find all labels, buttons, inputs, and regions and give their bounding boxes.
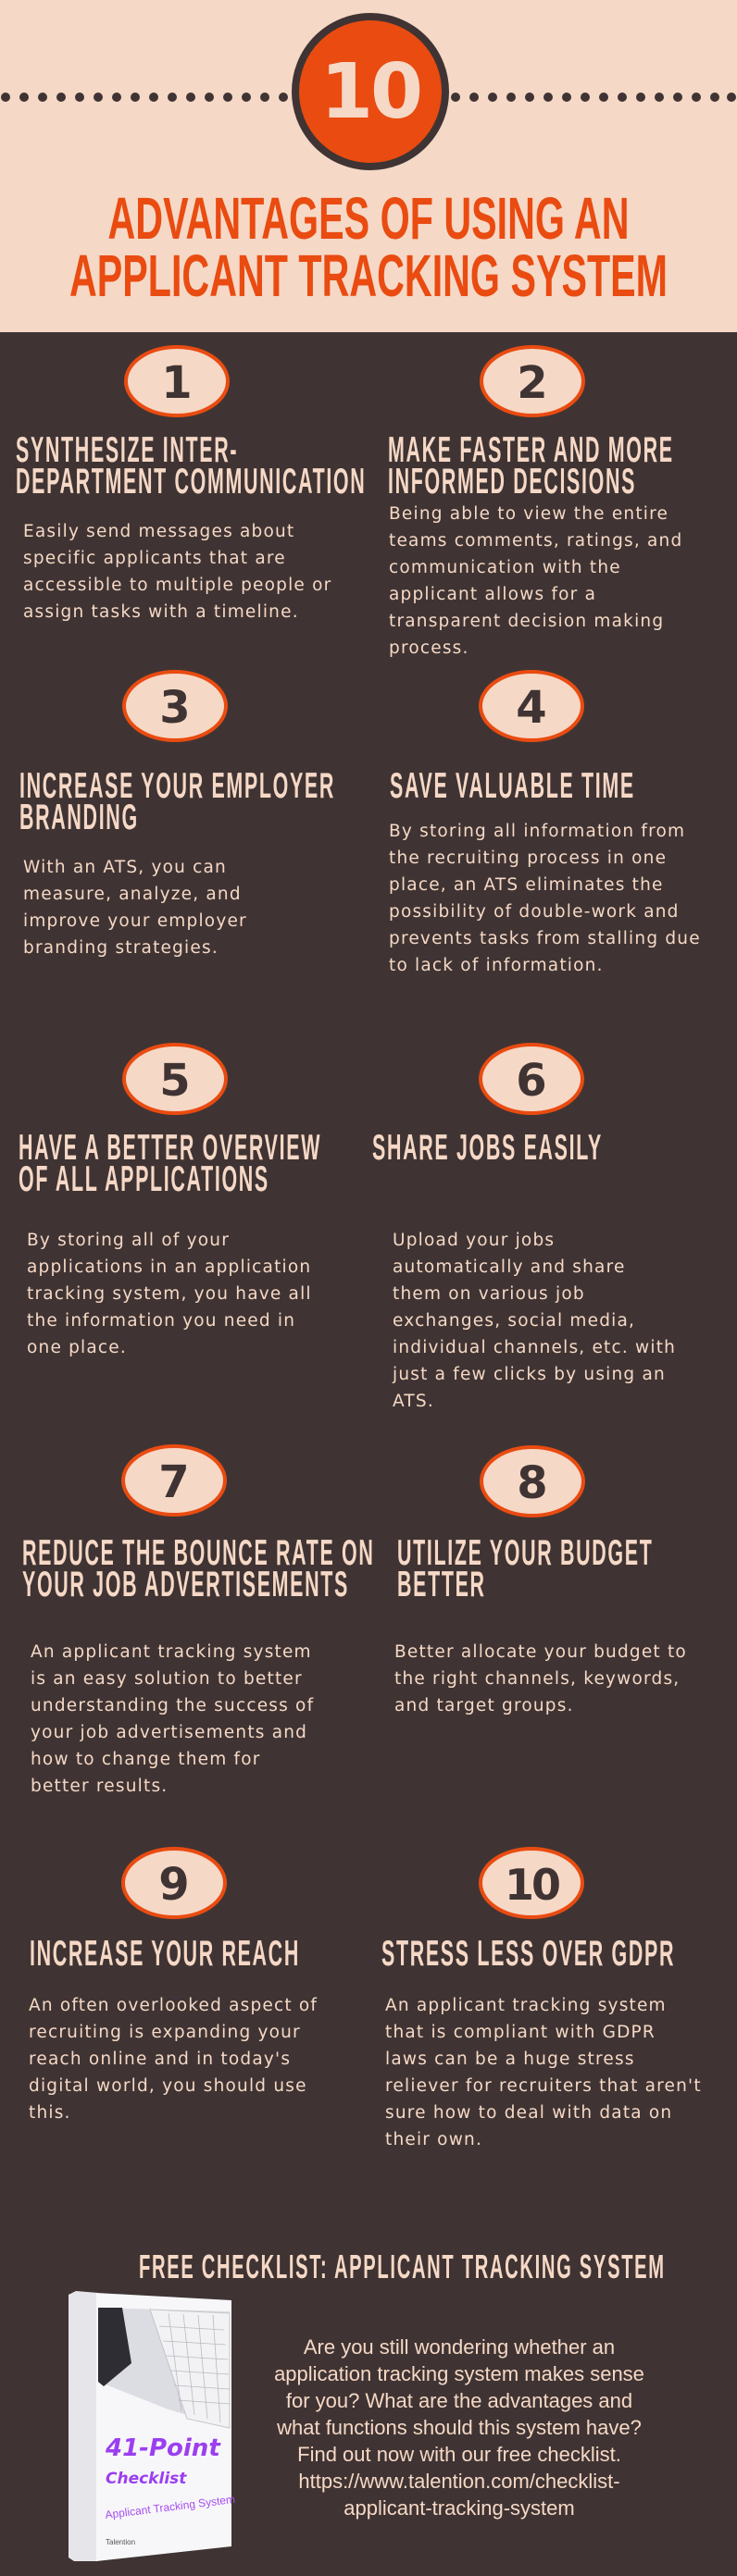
text 10: An applicant tracking system (385, 1996, 667, 2015)
heading 9: INCREASE YOUR REACH (30, 1934, 300, 1974)
heading 1 (16, 430, 366, 502)
text 1: accessible to multiple people or (23, 576, 331, 595)
text 4: place, an ATS eliminates the (389, 875, 664, 895)
heading 4: SAVE VALUABLE TIME (390, 766, 635, 806)
text 3: measure, analyze, and (23, 885, 242, 904)
text 1: assign tasks with a timeline. (23, 602, 299, 622)
text 4: By storing all information from (389, 822, 685, 841)
text 4: to lack of information. (389, 956, 604, 975)
oval 3 (122, 670, 228, 742)
oval 8: 8 (517, 1457, 548, 1509)
heading 5 (19, 1128, 321, 1199)
text 8: and target groups. (394, 1696, 574, 1715)
checklist paragraph: Are you still wondering whether an (304, 2335, 615, 2359)
text 1 (23, 522, 331, 622)
heading 3: BRANDING (19, 798, 139, 837)
text 10: laws can be a huge stress (385, 2050, 635, 2069)
checklist paragraph: Find out now with our free checklist. (297, 2443, 621, 2466)
text 10: that is compliant with GDPR (385, 2023, 656, 2042)
heading 10: STRESS LESS OVER GDPR (381, 1934, 675, 1974)
title (69, 185, 668, 309)
dotted line (1, 93, 736, 102)
text 2: transparent decision making (389, 612, 664, 631)
checklist paragraph: what functions should this system have? (277, 2416, 642, 2439)
text 5: the information you need in (27, 1311, 295, 1331)
big number circle: 10 (320, 48, 420, 136)
text 4: the recruiting process in one (389, 848, 667, 868)
text 6: automatically and share (393, 1257, 626, 1277)
oval 7 (121, 1444, 227, 1517)
oval 6 (479, 1043, 584, 1115)
text 6: Upload your jobs (393, 1231, 555, 1250)
checklist paragraph: applicant-tracking-system (344, 2496, 575, 2520)
oval 8 (480, 1445, 585, 1517)
text 1: Easily send messages about (23, 522, 294, 541)
heading 7: REDUCE THE BOUNCE RATE ON (22, 1533, 374, 1573)
text 6: them on various job (393, 1284, 585, 1304)
oval 9: 9 (158, 1859, 190, 1911)
text 10 (385, 1996, 702, 2149)
checklist paragraph: https://www.talention.com/checklist- (298, 2470, 620, 2493)
oval 10 (479, 1847, 584, 1919)
checklist paragraph: for you? What are the advantages and (286, 2389, 632, 2412)
text 6: exchanges, social media, (393, 1311, 635, 1331)
text 8 (394, 1642, 687, 1715)
heading 2: INFORMED DECISIONS (388, 462, 636, 502)
big number circle (292, 13, 449, 170)
oval 10: 10 (505, 1860, 559, 1910)
text 2: Being able to view the entire (389, 504, 668, 524)
oval 2 (480, 345, 585, 417)
text 1: specific applicants that are (23, 549, 286, 568)
book image: Applicant Tracking System (105, 2493, 235, 2521)
text 9: An often overlooked aspect of (29, 1996, 318, 2015)
text 4: possibility of double-work and (389, 902, 680, 922)
oval 5: 5 (159, 1055, 191, 1107)
heading 8 (397, 1533, 653, 1604)
book image (69, 2291, 235, 2561)
text 7: your job advertisements and (31, 1723, 307, 1742)
text 5: one place. (27, 1338, 127, 1357)
text 7: how to change them for (31, 1750, 261, 1769)
text 3: With an ATS, you can (23, 858, 227, 877)
text 6 (393, 1231, 676, 1411)
text 9: digital world, you should use (29, 2076, 307, 2096)
text 9: reach online and in today's (29, 2050, 291, 2069)
text 5: tracking system, you have all (27, 1284, 312, 1304)
oval 4: 4 (516, 682, 547, 734)
text 2 (389, 504, 682, 658)
oval 9 (121, 1847, 227, 1919)
oval 5 (122, 1043, 228, 1115)
text 6: individual channels, etc. with (393, 1338, 676, 1357)
checklist paragraph: application tracking system makes sense (274, 2362, 644, 2385)
oval 1 (124, 345, 230, 417)
heading 6: SHARE JOBS EASILY (372, 1128, 603, 1168)
heading 2: MAKE FASTER AND MORE (388, 430, 674, 470)
text 2: process. (389, 638, 469, 658)
heading 7 (22, 1533, 374, 1604)
text 2: applicant allows for a (389, 585, 596, 604)
text 10: reliever for recruiters that aren't (385, 2076, 702, 2096)
text 10: their own. (385, 2130, 482, 2149)
book image: Checklist (106, 2470, 187, 2488)
text 6: ATS. (393, 1392, 434, 1411)
heading 5: HAVE A BETTER OVERVIEW (19, 1128, 321, 1168)
text 3: branding strategies. (23, 938, 219, 958)
text 5 (27, 1231, 312, 1357)
text 2: teams comments, ratings, and (389, 531, 682, 551)
text 6: just a few clicks by using an (393, 1365, 666, 1384)
oval 4 (479, 670, 584, 742)
heading 2 (388, 430, 674, 502)
heading 1: DEPARTMENT COMMUNICATION (16, 462, 366, 502)
text 7: An applicant tracking system (31, 1642, 312, 1662)
text 9 (29, 1996, 318, 2123)
heading 3 (19, 766, 335, 837)
text 4 (389, 822, 701, 975)
text 8: the right channels, keywords, (394, 1669, 680, 1689)
heading 5: OF ALL APPLICATIONS (19, 1159, 269, 1199)
heading 8: BETTER (397, 1565, 486, 1604)
heading 1: SYNTHESIZE INTER- (16, 430, 238, 470)
text 10: sure how to deal with data on (385, 2103, 672, 2123)
text 9: recruiting is expanding your (29, 2023, 301, 2042)
text 8: Better allocate your budget to (394, 1642, 687, 1662)
oval 1: 1 (161, 357, 193, 409)
heading 7: YOUR JOB ADVERTISEMENTS (22, 1565, 349, 1604)
text 7: understanding the success of (31, 1696, 314, 1715)
text 9: this. (29, 2103, 71, 2123)
book image: 41-Point (105, 2434, 221, 2462)
oval 7: 7 (158, 1456, 190, 1508)
heading 3: INCREASE YOUR EMPLOYER (19, 766, 335, 806)
oval 3: 3 (159, 682, 191, 734)
text 3 (23, 858, 247, 958)
text 3: improve your employer (23, 911, 247, 931)
text 7: is an easy solution to better (31, 1669, 303, 1689)
text 4: prevents tasks from stalling due (389, 929, 701, 948)
header band (0, 0, 737, 332)
text 5: By storing all of your (27, 1231, 230, 1250)
heading 8: UTILIZE YOUR BUDGET (397, 1533, 653, 1573)
checklist paragraph (274, 2335, 644, 2520)
text 7 (31, 1642, 314, 1796)
text 2: communication with the (389, 558, 621, 577)
text 5: applications in an application (27, 1257, 311, 1277)
text 7: better results. (31, 1777, 168, 1796)
oval 2: 2 (517, 357, 548, 409)
book image: Talention (106, 2538, 135, 2546)
checklist heading: FREE CHECKLIST: APPLICANT TRACKING SYSTEM (139, 2248, 666, 2285)
oval 6: 6 (516, 1055, 547, 1107)
